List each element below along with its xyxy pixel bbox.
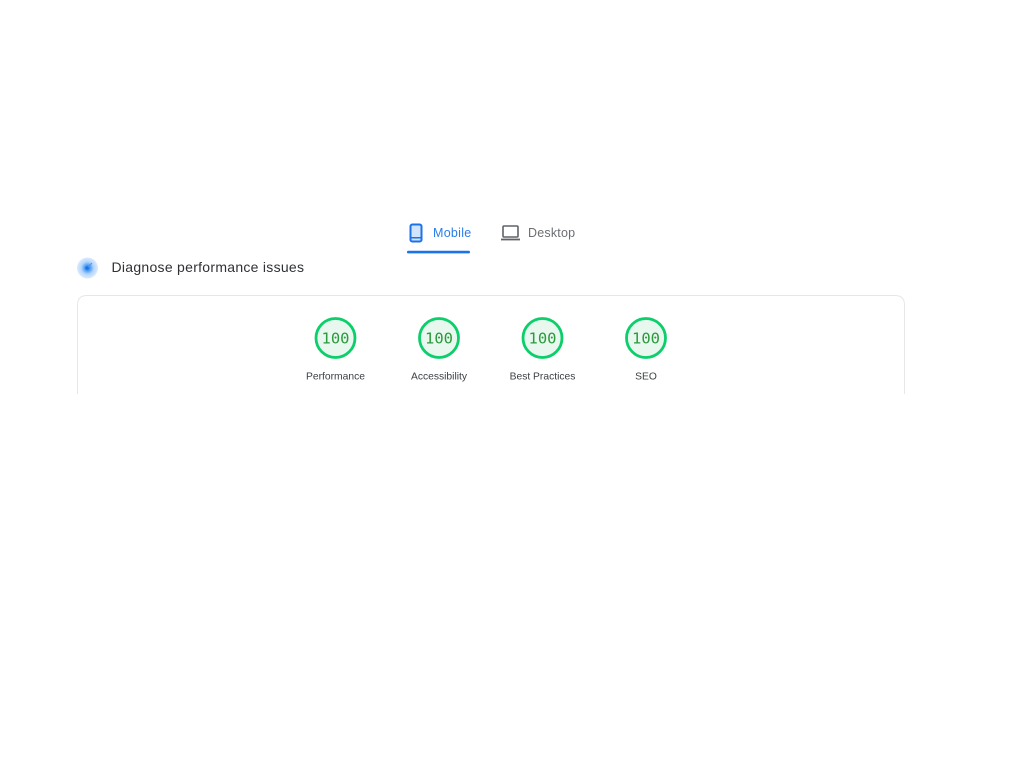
heading: Diagnose performance issues [77,258,304,278]
tab: Desktop [501,226,575,240]
score: Best Practices [510,318,575,382]
score value: 100 [528,330,556,348]
score value: 100 [632,330,660,348]
tab: Mobile [407,224,472,253]
label: Desktop: Desktop [528,226,575,240]
label: Best Practices [510,372,575,382]
label: Mobile: Mobile [433,226,472,240]
panel: scores card [78,296,904,394]
active tab underline [407,251,470,253]
label: SEO [635,372,657,382]
icon: laptop [501,226,520,240]
score: SEO [626,318,666,382]
gauge [626,318,666,358]
heading text: Diagnose performance issues [112,259,304,275]
icon: mobile phone [410,224,422,242]
score value: 100 [425,330,453,348]
score: Performance [306,318,365,382]
label: Accessibility [411,372,468,382]
gauge [316,318,355,358]
gauge [523,318,562,358]
gauge [420,318,458,358]
label: Performance [306,372,365,382]
score: Accessibility [411,318,468,382]
icon: radar [77,258,98,278]
score value: 100 [322,330,350,348]
